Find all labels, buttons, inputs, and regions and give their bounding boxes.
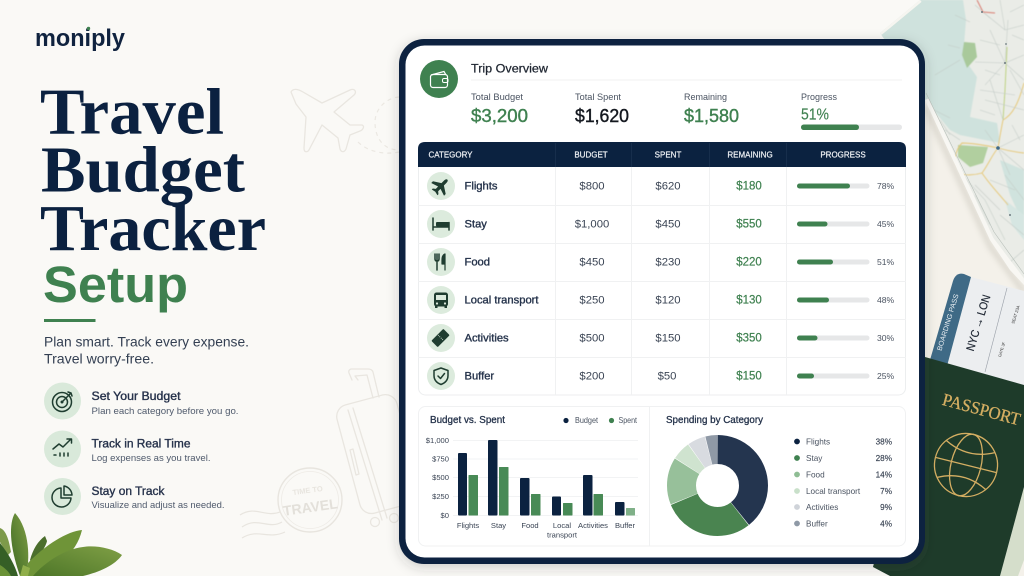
title underline <box>44 319 96 322</box>
feature: set your budget: Plan each category before you go. <box>92 405 238 416</box>
stat: total spent: $1,620 <box>575 105 629 126</box>
donut legend: 9% <box>880 503 892 512</box>
bar chart: budget vs spent: Buffer <box>615 521 636 530</box>
row: stay: $450 <box>655 218 681 230</box>
stat: total budget: Total Budget <box>471 92 523 103</box>
illustration: time to travel stamp: TRAVEL <box>282 495 339 519</box>
row: stay: $1,000 <box>575 218 609 230</box>
donut legend: 7% <box>880 487 892 496</box>
row: flights: $620 <box>655 180 681 192</box>
passport title: PASSPORT <box>940 389 1023 429</box>
icon: ticket <box>427 324 455 352</box>
donut legend: Activities <box>806 503 838 512</box>
tablet device <box>399 39 925 564</box>
row: local transport: $130 <box>736 294 762 306</box>
row: buffer: $50 <box>658 370 676 382</box>
row: stay: $550 <box>736 218 762 230</box>
budget table <box>418 142 906 395</box>
row: local transport <box>427 286 895 314</box>
panel: charts <box>418 406 906 546</box>
bar chart: budget vs spent: $0 <box>441 511 449 520</box>
stat: progress: 51% <box>801 106 829 124</box>
passport globe emblem <box>928 427 1004 503</box>
legend: budget and spent <box>563 416 638 425</box>
icon: fork and knife <box>427 248 455 276</box>
illustration: suitcase outline <box>334 369 423 526</box>
tablet screen <box>406 46 919 558</box>
icon: bed <box>427 210 455 238</box>
feature: track in real time: Log expenses as you travel. <box>92 452 210 463</box>
donut legend: Local transport <box>806 487 861 496</box>
illustration: time to travel stamp: TIME TO <box>292 484 323 497</box>
row: buffer <box>427 362 895 390</box>
icon: bus <box>427 286 455 314</box>
donut legend: Stay <box>806 454 823 463</box>
donut legend: Buffer <box>806 520 828 528</box>
icon: target <box>44 382 81 420</box>
row: activities: 30% <box>877 333 895 343</box>
title <box>40 76 266 265</box>
row: activities: Activities <box>464 332 509 344</box>
row: flights: $180 <box>736 180 762 192</box>
row: food: Food <box>464 256 490 268</box>
row: stay: Stay <box>464 218 487 230</box>
table header: BUDGET <box>574 150 608 160</box>
stat: progress <box>801 92 902 130</box>
row: local transport: $250 <box>579 294 605 306</box>
stat: total spent: Total Spent <box>575 92 621 103</box>
bar chart: budget vs spent: Flights <box>457 521 479 530</box>
logo dot <box>87 27 90 30</box>
feature: stay on track: Stay on Track <box>92 484 165 498</box>
bar chart: budget vs spent: Stay <box>491 521 506 530</box>
feature: set your budget: Set Your Budget <box>92 389 181 403</box>
map: lower right <box>1000 487 1024 576</box>
row: activities: $350 <box>736 332 762 344</box>
title: Travel <box>40 76 224 148</box>
row: activities: $150 <box>655 332 681 344</box>
table header: REMAINING <box>727 150 773 160</box>
bar chart: budget vs spent: Activities <box>578 521 608 530</box>
bar chart: budget vs spent: $500 <box>432 473 449 482</box>
donut legend: 28% <box>876 454 892 463</box>
stat: progress: Progress <box>801 92 837 103</box>
table header: SPENT <box>655 150 681 160</box>
icon: shield <box>427 362 455 390</box>
row: local transport: Local transport <box>464 294 539 306</box>
row: buffer: 25% <box>877 371 895 381</box>
row: food: $220 <box>736 256 762 268</box>
icon: trend chart <box>44 430 81 468</box>
row: buffer: $150 <box>736 370 762 382</box>
illustration: dashed circle route <box>358 97 399 153</box>
row: buffer: Buffer <box>464 370 494 382</box>
row: buffer: $200 <box>579 370 605 382</box>
stat: total spent <box>575 92 629 126</box>
row: local transport: $120 <box>655 294 681 306</box>
row: food: $230 <box>655 256 681 268</box>
boarding pass: BOARDING PASS <box>937 293 961 352</box>
icon: wallet <box>420 60 458 98</box>
stat: remaining: $1,580 <box>684 105 739 126</box>
row: local transport: 48% <box>877 295 895 305</box>
feature: track in real time <box>44 430 210 468</box>
feature: stay on track: Visualize and adjust as needed. <box>92 499 224 510</box>
row: flights <box>427 172 895 200</box>
legend: budget and spent: Budget <box>575 416 599 425</box>
table header <box>418 142 906 167</box>
trip overview header: Trip Overview <box>471 62 548 76</box>
row: food: $450 <box>579 256 605 268</box>
donut legend <box>794 438 892 528</box>
boarding pass <box>930 274 1024 390</box>
tagline: Travel worry-free. <box>44 350 154 366</box>
row: flights: $800 <box>579 180 605 192</box>
row: stay: 45% <box>877 219 895 229</box>
boarding pass: GATE 3F <box>998 341 1006 358</box>
row: flights: Flights <box>464 180 498 192</box>
feature: track in real time: Track in Real Time <box>92 436 191 450</box>
row: activities: $500 <box>579 332 605 344</box>
logo: moniply <box>35 26 125 52</box>
trip overview header <box>420 60 902 98</box>
feature: stay on track <box>44 478 224 515</box>
title: Tracker <box>40 192 266 265</box>
table header: CATEGORY <box>428 150 473 160</box>
donut legend: Food <box>806 470 825 480</box>
bar chart: budget vs spent: Food <box>521 521 539 530</box>
bar chart: budget vs spent: Local <box>553 521 571 530</box>
table header: PROGRESS <box>820 150 866 160</box>
bar chart: budget vs spent: $750 <box>432 454 449 464</box>
stat: total budget <box>471 92 528 126</box>
passport <box>873 357 1024 576</box>
row: food: 51% <box>877 257 895 267</box>
row: flights: 78% <box>877 181 895 191</box>
donut legend: 38% <box>876 438 892 446</box>
illustration: time to travel stamp <box>240 468 342 538</box>
map: upper right <box>870 0 1024 290</box>
boarding pass: SEAT 23A <box>1010 304 1021 324</box>
icon: pie chart <box>44 478 81 515</box>
donut legend: 14% <box>876 470 892 480</box>
illustration: plane outline <box>291 89 363 152</box>
icon: plane <box>427 172 455 200</box>
row: activities <box>427 324 895 352</box>
stat: remaining: Remaining <box>684 92 727 103</box>
stat: remaining <box>684 92 739 126</box>
title: Budget <box>41 134 245 206</box>
bar chart: budget vs spent: Budget vs. Spent <box>430 415 505 426</box>
donut chart: spending by category: Spending by Category <box>666 415 764 426</box>
donut legend: 4% <box>880 520 892 528</box>
legend: budget and spent: Spent <box>618 416 638 425</box>
plant <box>0 513 122 576</box>
subtitle: Setup <box>43 256 188 313</box>
bar chart: budget vs spent: transport <box>547 530 578 540</box>
donut legend: Flights <box>806 438 830 446</box>
feature: set your budget <box>44 382 238 420</box>
tagline <box>44 334 249 366</box>
bar chart: budget vs spent: $1,000 <box>426 436 449 445</box>
bar chart: budget vs spent <box>426 415 638 540</box>
bar chart: budget vs spent: $250 <box>432 492 449 501</box>
boarding pass: NYC → LON <box>965 294 993 353</box>
stat: total budget: $3,200 <box>471 105 528 126</box>
donut chart: spending by category <box>666 415 764 522</box>
tagline: Plan smart. Track every expense. <box>44 334 249 350</box>
row: food <box>427 248 895 276</box>
row: stay <box>427 210 895 238</box>
